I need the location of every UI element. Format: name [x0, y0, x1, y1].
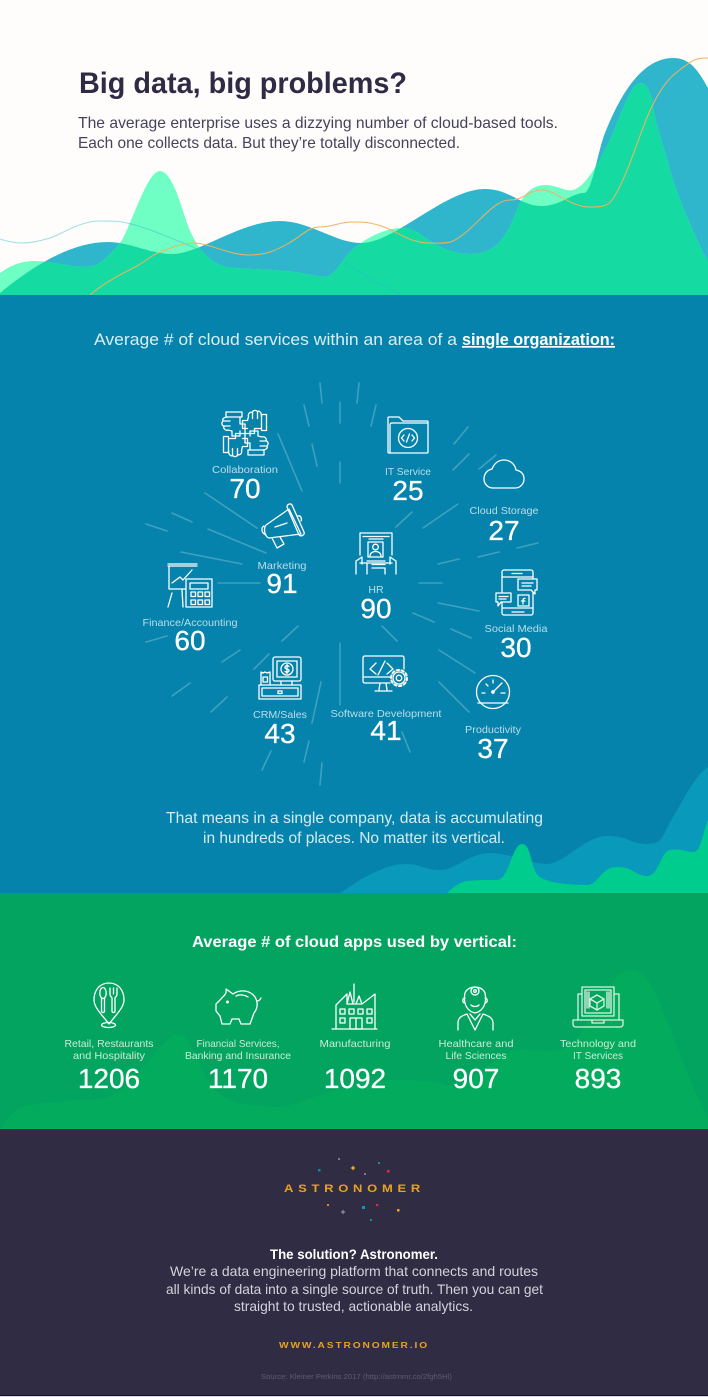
- item: Finance/Accounting: Finance/Accounting: [142, 617, 238, 629]
- icon: piggy bank: [216, 989, 261, 1024]
- item: Marketing: [258, 504, 307, 599]
- item: Retail: and Hospitality: [73, 1050, 146, 1062]
- text block: solution copy: straight to trusted, actionable analytics.: [234, 1298, 473, 1314]
- icon: phone with bubbles: [496, 570, 537, 615]
- text block: intro: Each one collects data. But they’re totally disconnected.: [78, 135, 460, 152]
- link: website: WWW.ASTRONOMER.IO: [279, 1341, 429, 1350]
- item: Technology: Technology and: [560, 1038, 636, 1050]
- item: Cloud Storage: 27: [488, 515, 520, 546]
- text block: solution copy: We’re a data engineering platform that connects and routes: [170, 1263, 538, 1279]
- logo: stars: [318, 1158, 400, 1221]
- item: Collaboration: [212, 410, 278, 504]
- item: Social Media: 30: [500, 632, 532, 663]
- item: Healthcare: Life Sciences: [446, 1050, 506, 1062]
- chart: teal wave bottom: [340, 767, 708, 893]
- item: Collaboration: 70: [229, 473, 261, 504]
- chart: orange trend line: [90, 58, 708, 295]
- item: Social Media: [484, 570, 548, 663]
- item: Software Development: 41: [370, 715, 402, 746]
- item: Productivity: 37: [477, 733, 509, 764]
- item: IT Service: [385, 417, 431, 506]
- panel: cloud apps by vertical: [0, 893, 708, 1129]
- item: CRM/Sales: CRM/Sales: [253, 709, 307, 721]
- icon: cloud: [484, 460, 524, 488]
- item: Marketing: 91: [266, 568, 298, 599]
- heading: solution: The solution? Astronomer.: [270, 1246, 438, 1262]
- item: Manufacturing: 1092: [324, 1063, 386, 1094]
- item: HR: [356, 533, 396, 624]
- heading: cloud services: Average # of cloud services within an area of a: [94, 330, 458, 349]
- heading: cloud services: single organization:: [462, 330, 615, 349]
- heading: title: Big data, big problems?: [79, 67, 407, 100]
- icon: chart and calculator: [168, 564, 212, 607]
- item: Social Media: Social Media: [484, 623, 548, 635]
- text block: intro: [78, 115, 558, 152]
- chart: light green wave: [0, 83, 708, 295]
- logo: wordmark: ASTRONOMER: [284, 1183, 425, 1195]
- icon: pin with cutlery: [94, 983, 124, 1028]
- panel: cloud services by area: [0, 295, 708, 893]
- item: Technology: [560, 987, 636, 1094]
- item: Marketing: Marketing: [258, 560, 307, 572]
- text block: takeaway: [166, 810, 543, 847]
- item: Healthcare: Healthcare and: [438, 1038, 514, 1050]
- icon: hands: [222, 410, 268, 457]
- item: HR: HR: [368, 584, 384, 596]
- radial rays: [146, 383, 538, 785]
- item: Software Development: Software Development: [330, 708, 442, 720]
- heading: cloud apps: Average # of cloud apps used by vertical:: [192, 934, 517, 951]
- icon: resume: [356, 533, 396, 574]
- icon: monitor with gear: [363, 656, 407, 691]
- text block: solution copy: [166, 1263, 543, 1314]
- icon: laptop with cube: [573, 987, 623, 1027]
- item: Retail: Retail, Restaurants: [64, 1038, 154, 1050]
- item: CRM/Sales: 43: [264, 718, 296, 749]
- item: IT Service: 25: [392, 475, 424, 506]
- text block: takeaway: in hundreds of places. No matter its vertical.: [203, 830, 505, 847]
- item: Healthcare: [438, 987, 514, 1094]
- item: Retail: [64, 983, 154, 1094]
- item: Financial: Financial Services,: [196, 1038, 280, 1050]
- heading: cloud services: [94, 330, 615, 349]
- icon: gauge: [476, 676, 510, 708]
- chart: pale blue trend line: [0, 221, 400, 295]
- item: Financial: Banking and Insurance: [185, 1050, 291, 1062]
- item: Healthcare: 907: [453, 1063, 499, 1094]
- icon: doctor: [458, 987, 493, 1030]
- item: Collaboration: Collaboration: [212, 464, 278, 476]
- panel: header: [0, 58, 708, 295]
- chart: green wave bottom: [447, 820, 708, 893]
- item: Manufacturing: [320, 984, 391, 1094]
- item: Software Development: [330, 656, 442, 746]
- item: Technology: 893: [575, 1063, 621, 1094]
- item: Finance/Accounting: [142, 564, 238, 656]
- text block: intro: The average enterprise uses a dizzying number of cloud-based tools.: [78, 115, 558, 132]
- item: CRM/Sales: [253, 657, 307, 749]
- icon: megaphone: [262, 504, 304, 548]
- item: Financial: 1170: [208, 1063, 268, 1094]
- item: IT Service: IT Service: [385, 466, 431, 478]
- item: Cloud Storage: [470, 460, 539, 546]
- item: Retail: 1206: [78, 1063, 140, 1094]
- item: Manufacturing: Manufacturing: [320, 1038, 391, 1050]
- item: Productivity: [465, 676, 522, 764]
- item: Finance/Accounting: 60: [174, 625, 206, 656]
- text block: solution copy: all kinds of data into a single source of truth. Then you can get: [166, 1281, 543, 1297]
- item: Technology: IT Services: [573, 1050, 623, 1062]
- item: Financial: [185, 989, 291, 1094]
- icon: cash register: [259, 657, 301, 699]
- icon: code folder: [388, 417, 428, 453]
- source note: Source: Kleiner Perkins 2017 (http://astrnmr.co/2fgh5Hl): [261, 1372, 453, 1381]
- icon: factory: [332, 984, 377, 1029]
- panel: solution footer: [0, 1129, 708, 1395]
- chart: background wave: [0, 970, 708, 1129]
- text block: takeaway: That means in a single company, data is accumulating: [166, 810, 543, 827]
- item: HR: 90: [360, 593, 392, 624]
- item: Cloud Storage: Cloud Storage: [470, 505, 539, 517]
- item: Productivity: Productivity: [465, 724, 522, 736]
- chart: green overlap wave: [0, 83, 708, 295]
- chart: blue wave: [0, 58, 708, 295]
